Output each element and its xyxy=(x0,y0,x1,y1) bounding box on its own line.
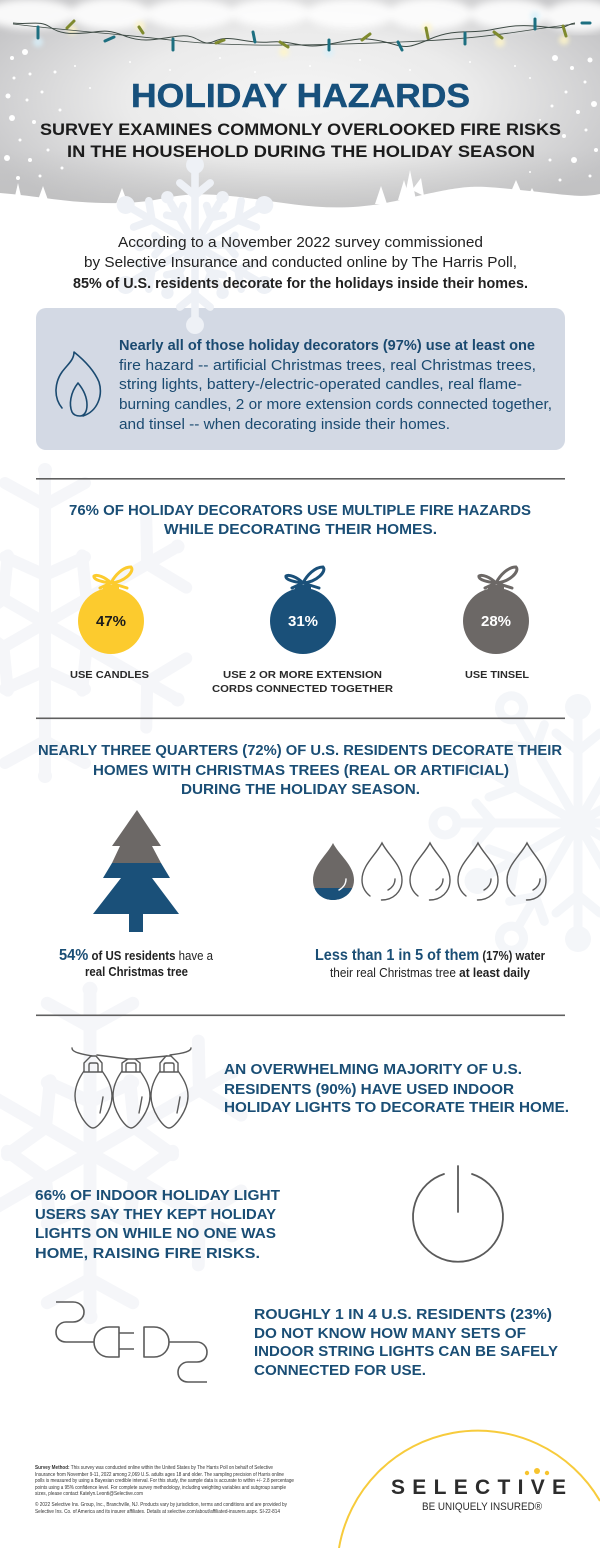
heading: multiple fire hazards xyxy=(69,503,531,538)
label: use 2 or more extension cords: CORDS CONNECTED TOGETHER xyxy=(212,683,393,695)
logo dots xyxy=(525,1468,549,1475)
survey method footnote: sizes, please contact Katelyn.Leonti@Selective.com xyxy=(35,1491,143,1497)
ornament: 28% tinsel xyxy=(463,567,529,654)
icon: flame xyxy=(56,352,100,416)
ornament: 31% extension cords xyxy=(270,567,336,654)
label: use candles: USE CANDLES xyxy=(70,669,149,681)
heading: 66% left lights on: HOME, RAISING FIRE RISKS. xyxy=(35,1246,260,1262)
heading: 90% indoor lights: RESIDENTS (90%) HAVE USED INDOOR xyxy=(224,1082,515,1098)
callout text: and tinsel -- when decorating inside their homes. xyxy=(119,416,450,433)
survey method footnote: polls is measured by using a Bayesian credible interval. For this study, the sample data is accurate to within +/- 2.8 percentage xyxy=(35,1478,294,1484)
subtitle: IN THE HOUSEHOLD DURING THE HOLIDAY SEASON xyxy=(67,142,535,161)
snowflake: right xyxy=(433,687,600,959)
drop: filled xyxy=(313,843,354,900)
heading: 90% indoor lights xyxy=(224,1062,569,1116)
label: use tinsel: USE TINSEL xyxy=(465,669,530,681)
intro text: According to a November 2022 survey commissioned xyxy=(118,234,483,251)
heading: 23% string lights: INDOOR STRING LIGHTS CAN BE SAFELY xyxy=(254,1344,558,1360)
heading: 66% left lights on xyxy=(35,1188,280,1262)
snowflake: top centre xyxy=(110,156,280,334)
logo: Selective xyxy=(391,1468,566,1513)
survey method footnote: Selective Ins. Co. of America and its insurer affiliates. Details at selective.com/about/affiliated-insurers.aspx. SI-22-814 xyxy=(35,1509,280,1515)
heading: 23% string lights: ROUGHLY 1 IN 4 U.S. RESIDENTS (23%) xyxy=(254,1307,552,1323)
icon: christmas tree xyxy=(93,810,179,932)
icon: water drops xyxy=(313,843,546,900)
intro text xyxy=(73,234,528,292)
snowflake: lower left xyxy=(0,982,260,1324)
subtitle xyxy=(40,120,561,161)
text: less than 1 in 5: their real Christmas tree at least daily xyxy=(330,966,530,980)
label: use 2 or more extension cords xyxy=(212,669,393,695)
callout text xyxy=(119,337,552,433)
callout text: string lights, battery-/electric-operated candles, real flame- xyxy=(119,376,522,393)
survey method footnote: points using a 95% confidence level. For complete survey methodology, including weighting variables and subgroup sample xyxy=(35,1485,286,1491)
text: less than 1 in 5: Less than 1 in 5 of them (17%) water xyxy=(315,947,545,964)
heading: multiple fire hazards: WHILE DECORATING THEIR HOMES. xyxy=(164,522,437,538)
heading: 23% string lights xyxy=(254,1307,558,1379)
intro text: by Selective Insurance and conducted online by The Harris Poll, xyxy=(84,254,517,271)
text: 54% real tree: real Christmas tree xyxy=(85,965,188,979)
heading: 23% string lights: DO NOT KNOW HOW MANY SETS OF xyxy=(254,1326,526,1342)
logo arc xyxy=(339,1431,600,1548)
logo: Selective: SELECTIVE xyxy=(391,1476,566,1499)
text: 54% real tree: 54% of US residents have a xyxy=(59,947,213,964)
heading: christmas trees: DURING THE HOLIDAY SEASON. xyxy=(181,782,420,798)
icon: power symbol xyxy=(413,1166,503,1262)
heading: multiple fire hazards: 76% OF HOLIDAY DECORATORS USE MULTIPLE FIRE HAZARDS xyxy=(69,503,531,519)
heading: christmas trees: HOMES WITH CHRISTMAS TREES (REAL OR ARTIFICIAL) xyxy=(93,763,509,779)
callout text: Nearly all of those holiday decorators (97%) use at least one xyxy=(119,337,535,354)
heading: 66% left lights on: LIGHTS ON WHILE NO ONE WAS xyxy=(35,1226,276,1242)
subtitle: SURVEY EXAMINES COMMONLY OVERLOOKED FIRE RISKS xyxy=(40,120,561,139)
icon: string light bulbs xyxy=(72,1048,191,1128)
text: 54% real tree xyxy=(59,947,213,979)
survey method footnote: Insurance from November 9-11, 2022 among 2,069 U.S. adults ages 18 and older. The sampling precision of Harris online xyxy=(35,1472,284,1478)
panel: fire hazard callout xyxy=(36,308,565,450)
string lights xyxy=(13,11,590,57)
heading: 66% left lights on: USERS SAY THEY KEPT HOLIDAY xyxy=(35,1207,276,1223)
label: use 2 or more extension cords: USE 2 OR MORE EXTENSION xyxy=(223,669,382,681)
snowflake: left xyxy=(0,463,204,783)
header background xyxy=(0,0,600,215)
snow ground xyxy=(0,170,600,225)
text: less than 1 in 5 xyxy=(315,947,545,980)
heading: christmas trees xyxy=(38,743,563,798)
survey method footnote: © 2022 Selective Ins. Group, Inc., Branchville, NJ. Products vary by jurisdiction, terms and conditions and are provided by xyxy=(35,1501,287,1508)
heading: christmas trees: NEARLY THREE QUARTERS (72%) OF U.S. RESIDENTS DECORATE THEIR xyxy=(38,743,563,759)
heading: 66% left lights on: 66% OF INDOOR HOLIDAY LIGHT xyxy=(35,1188,280,1204)
callout text: burning candles, 2 or more extension cords connected together, xyxy=(119,396,552,413)
title: HOLIDAY HAZARDS xyxy=(131,77,470,114)
ornament: 31% extension cords: 31% xyxy=(288,613,318,630)
heading: 90% indoor lights: AN OVERWHELMING MAJORITY OF U.S. xyxy=(224,1062,522,1078)
survey method footnote xyxy=(35,1465,294,1515)
survey method footnote: Survey Method: This survey was conducted online within the United States by The Harris Poll on behalf of Selective xyxy=(35,1465,273,1471)
heading: 90% indoor lights: HOLIDAY LIGHTS TO DECORATE THEIR HOME. xyxy=(224,1100,569,1116)
heading: 23% string lights: CONNECTED FOR USE. xyxy=(254,1363,426,1379)
ornament: 28% tinsel: 28% xyxy=(481,613,511,630)
intro text: 85% of U.S. residents decorate for the holidays inside their homes. xyxy=(73,275,528,292)
ornament: 47% candles xyxy=(78,567,144,654)
tagline: BE UNIQUELY INSURED® xyxy=(422,1501,542,1513)
callout text: fire hazard -- artificial Christmas trees, real Christmas trees, xyxy=(119,357,536,374)
ornament: 47% candles: 47% xyxy=(96,613,126,630)
icon: plug and socket xyxy=(56,1302,207,1382)
